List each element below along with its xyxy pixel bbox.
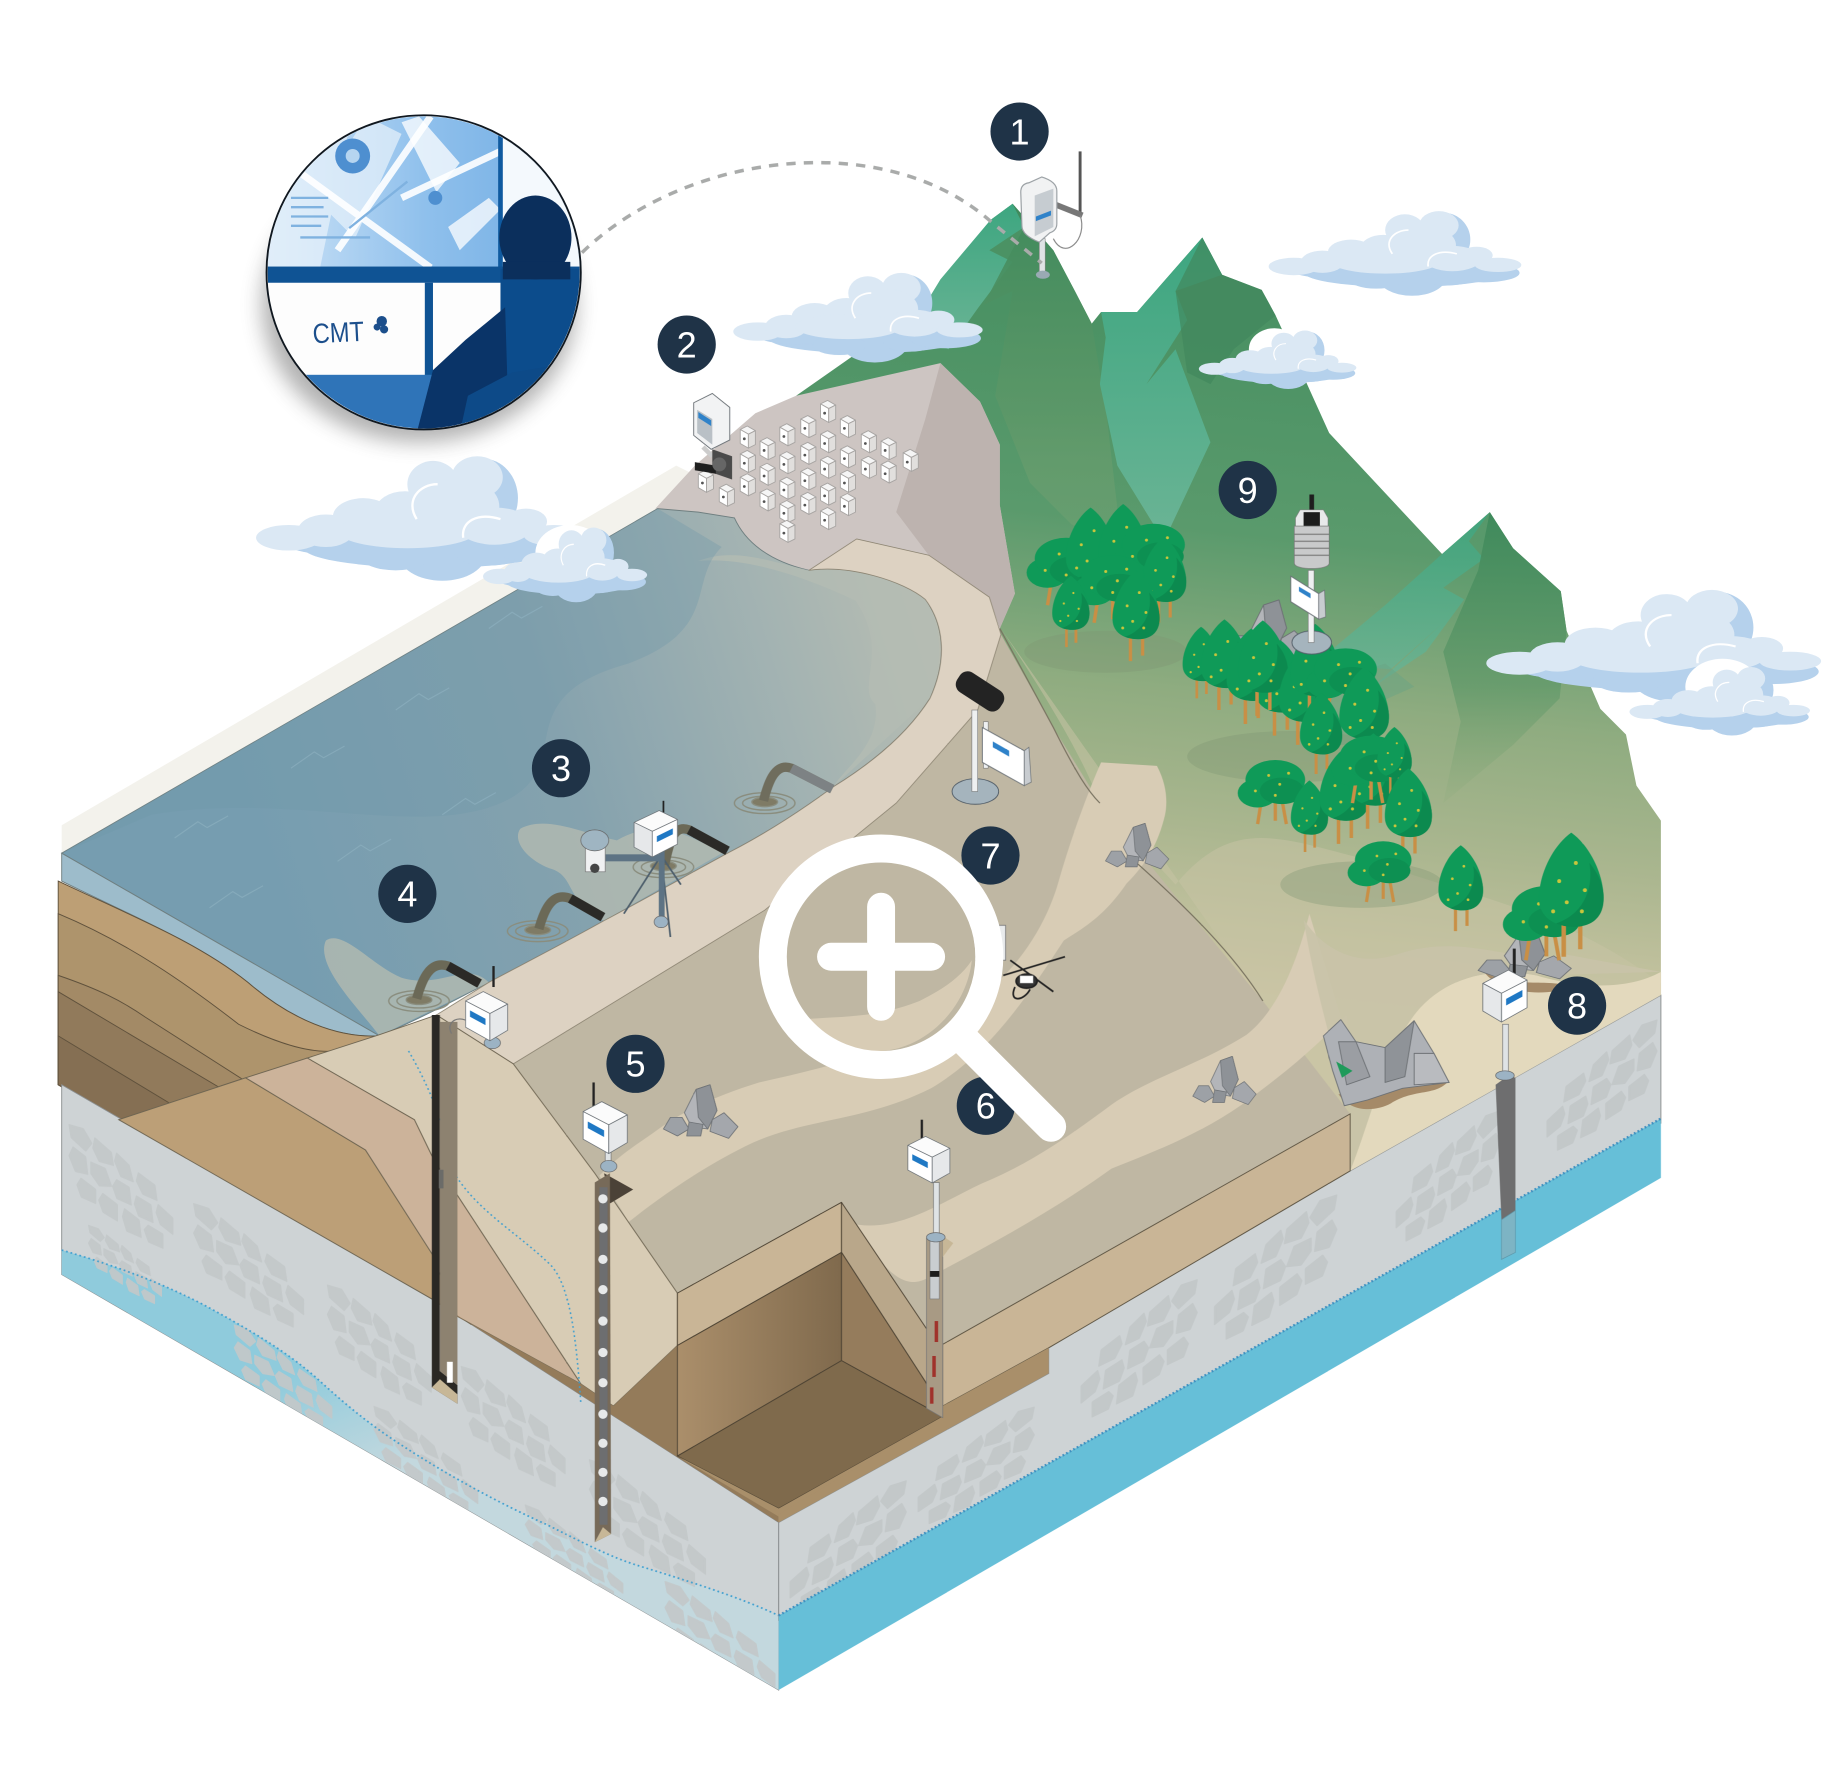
soil nail grid	[698, 400, 918, 542]
dam section face	[307, 1015, 677, 1406]
sand right corner	[1350, 972, 1661, 1171]
device 2 total station	[694, 393, 732, 480]
dashed connection arc	[582, 163, 1042, 263]
control room photo	[262, 111, 588, 442]
floor	[306, 374, 541, 428]
right section tan band	[943, 1114, 1350, 1406]
pipe 1	[389, 965, 480, 1011]
device 5 datalogger	[583, 1082, 627, 1172]
badge 3: 3	[551, 748, 571, 789]
trees cluster two	[1183, 619, 1432, 902]
open pit	[677, 1202, 943, 1517]
silt plume at corner	[324, 938, 489, 1036]
map screen	[262, 111, 588, 268]
cloud left large	[256, 456, 584, 581]
plateau surface	[513, 629, 1350, 1344]
badge 5: 5	[625, 1044, 646, 1085]
slope crest line	[1000, 629, 1263, 1001]
badge 1	[990, 102, 1049, 161]
discharge pipes	[389, 767, 832, 1011]
water side face	[62, 853, 379, 1036]
magnifier zoom icon	[773, 849, 1051, 1127]
pipe 3	[633, 829, 727, 878]
device 4 datalogger	[450, 966, 508, 1049]
pit floor	[677, 1361, 943, 1508]
pink clay layer	[246, 1058, 581, 1384]
device 8 datalogger	[1483, 949, 1527, 1080]
device 3 tripod camera	[581, 801, 681, 937]
badge 3	[532, 739, 590, 797]
pit upper wall	[677, 1202, 842, 1345]
badge 8	[1548, 977, 1606, 1035]
badge 7	[961, 826, 1020, 885]
stone pattern left	[69, 1121, 774, 1707]
right foundation band	[779, 1348, 1049, 1522]
dam crest road	[436, 539, 1001, 1064]
rock pile with soil	[1323, 1020, 1449, 1109]
mountain silhouette	[796, 204, 1661, 1171]
borehole 6 rod extensometer	[926, 1236, 953, 1418]
right grey face	[779, 995, 1661, 1620]
beige right corner	[1304, 920, 1661, 1171]
left strata layers	[58, 881, 379, 1120]
groundwater dotted line right	[779, 1119, 1661, 1616]
badge 9: 9	[1238, 470, 1258, 511]
borehole 8 piezometer	[1496, 1075, 1515, 1259]
right groundwater	[779, 1119, 1661, 1690]
badge 5	[606, 1035, 665, 1093]
borehole 4 piezometer	[432, 1015, 457, 1404]
trees cluster one	[1027, 504, 1186, 661]
grey left face	[62, 1085, 779, 1690]
tree shadows	[1024, 631, 1443, 908]
stone pattern right	[791, 1016, 1656, 1621]
badge 9	[1219, 461, 1277, 519]
small rocks	[663, 600, 1571, 1138]
groundwater left face	[62, 1250, 779, 1690]
cloud top centre	[733, 273, 983, 363]
badge 6	[957, 1077, 1015, 1135]
foundation band	[432, 1299, 779, 1522]
trees cluster three	[1438, 833, 1604, 960]
badge 4: 4	[397, 874, 417, 915]
badge 2: 2	[677, 324, 697, 365]
pit right upper wall	[842, 1202, 943, 1416]
cloud mid right	[1199, 328, 1356, 389]
pipe 4	[734, 767, 832, 814]
cloud top right	[1269, 211, 1521, 296]
pit back wall	[677, 1252, 842, 1456]
lower green slope	[1001, 629, 1661, 1171]
device 1 gateway	[1021, 151, 1082, 279]
seepage line	[409, 1051, 581, 1403]
mountain facets	[919, 204, 1567, 803]
badge 1: 1	[1010, 111, 1030, 152]
sand band lower	[850, 914, 1350, 1282]
logo text: CMT	[312, 317, 365, 350]
white panels	[268, 282, 425, 283]
groundwater dotted line left	[62, 1250, 779, 1616]
silt plume near pipes	[518, 824, 724, 921]
tan lower layer	[119, 1078, 471, 1325]
badge 6: 6	[976, 1086, 996, 1127]
back edge strip	[62, 466, 704, 853]
cloud left small	[483, 525, 647, 602]
device 6 datalogger	[908, 1120, 950, 1242]
wave marks	[175, 606, 542, 908]
silt plume near dam head	[698, 555, 939, 787]
darker water band	[62, 509, 722, 853]
rock slope with anchors	[655, 363, 1015, 629]
mountain range	[796, 204, 1661, 1171]
sand band upper	[599, 762, 1166, 1222]
person	[499, 196, 571, 279]
logo mark	[374, 316, 388, 333]
upper rock pile	[1478, 931, 1571, 992]
weather station 9	[1291, 495, 1332, 654]
badge 7: 7	[980, 835, 1001, 876]
badge 8: 8	[1567, 985, 1587, 1026]
device 7 hidden box	[973, 925, 1006, 960]
device 7 camera station	[952, 668, 1031, 804]
cloud far right large	[1486, 590, 1821, 702]
clouds	[256, 211, 1821, 736]
rock shading	[896, 363, 1015, 629]
badge 4	[378, 865, 436, 923]
borehole 5 in-place inclinometer	[595, 1173, 633, 1542]
right screen	[501, 137, 580, 267]
drone	[1003, 957, 1065, 999]
pipe 2	[507, 897, 603, 942]
pit right lower wall	[842, 1252, 943, 1416]
water surface	[62, 509, 941, 1036]
horizontal frame	[262, 267, 588, 283]
pit rim	[677, 1416, 943, 1517]
rock face	[655, 363, 1015, 629]
badge 2	[658, 315, 716, 374]
right panel	[500, 269, 580, 408]
cloud far right small	[1629, 659, 1810, 736]
